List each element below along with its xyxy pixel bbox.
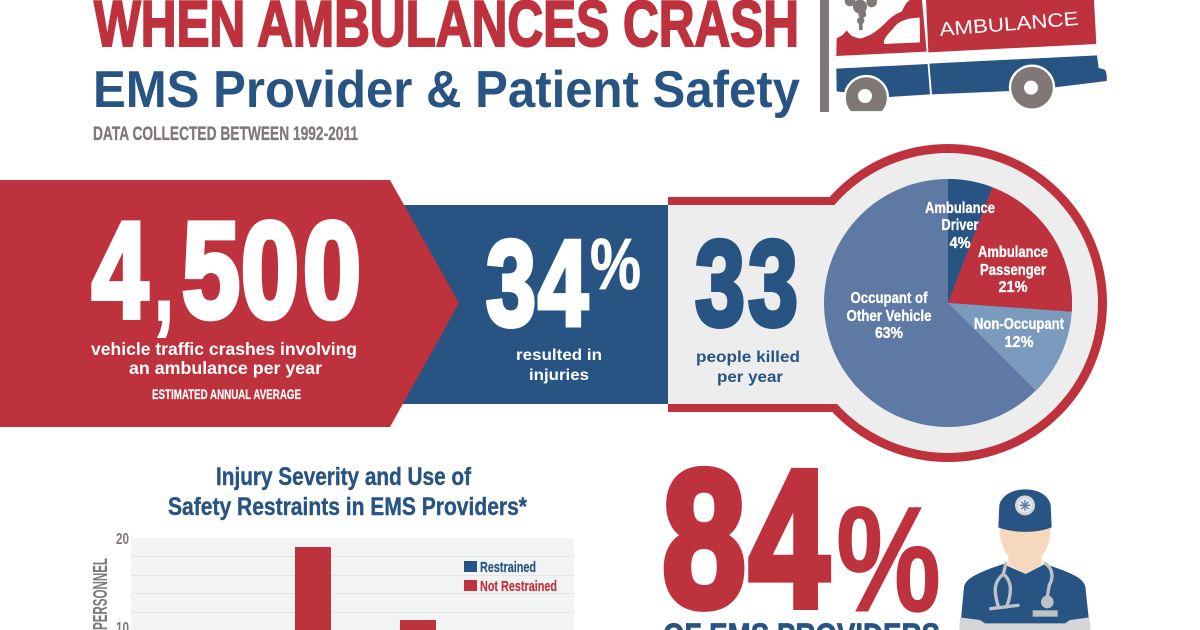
stat: 33 killed: people killed — [696, 349, 800, 366]
legend: Not Restrained — [480, 578, 557, 595]
stat: 33 killed: per year — [717, 369, 783, 386]
pie label: non-occupant: 12% — [1004, 334, 1034, 351]
pie label: other vehicle: Other Vehicle — [846, 308, 932, 325]
legend: Restrained — [480, 559, 536, 576]
smoke — [845, 0, 877, 30]
stat: 34% injuries: 3 — [486, 215, 536, 351]
stat: 33 killed: 3 — [748, 215, 798, 351]
label: AMBULANCE — [939, 9, 1079, 41]
pie label: driver: Driver — [942, 217, 978, 234]
divider post — [820, 0, 829, 112]
bar chart — [90, 531, 574, 630]
bar: not restrained short — [400, 620, 436, 630]
stat: 4,500 crashes: 0 — [303, 194, 361, 346]
pie label: other vehicle — [846, 290, 932, 342]
pie label: driver: Ambulance — [925, 200, 995, 217]
stat: 4,500 crashes: 0 — [241, 194, 299, 346]
stat: 34% injuries — [486, 215, 641, 384]
box body — [926, 0, 1096, 52]
pie chart: people killed by role — [824, 179, 1072, 427]
bar: not restrained tall — [295, 547, 331, 630]
stat: 34% injuries: 4 — [538, 215, 588, 351]
cap — [998, 489, 1052, 532]
icon: EMS provider — [959, 489, 1091, 630]
pie label: passenger: Passenger — [980, 262, 1046, 279]
pie label: driver: 4% — [950, 235, 970, 252]
pie label: driver — [925, 200, 995, 252]
torso — [960, 564, 1090, 630]
stat: 33 killed: 3 — [695, 215, 745, 351]
lower body — [836, 64, 930, 97]
stat: 4,500 crashes — [91, 194, 361, 402]
pie label: other vehicle: 63% — [875, 325, 903, 342]
stat: 4,500 crashes: 5 — [182, 194, 240, 346]
y axis title: PERSONNEL — [90, 558, 112, 630]
legend — [464, 559, 557, 595]
date range note: DATA COLLECTED BETWEEN 1992-2011 — [93, 124, 358, 145]
stat: 4,500 crashes: vehicle traffic crashes involving — [91, 339, 357, 359]
stat: 34% injuries: % — [590, 225, 641, 305]
panel: injuries band — [380, 205, 668, 404]
stat: 34% injuries: injuries — [529, 367, 589, 384]
stat: 33 killed — [695, 215, 800, 386]
y axis labels — [116, 531, 129, 630]
panel: crashes arrow — [0, 180, 459, 427]
wheels — [845, 76, 888, 112]
chart heading: Safety Restraints in EMS Providers* — [168, 493, 527, 521]
chart heading: Injury Severity and Use of — [216, 463, 472, 491]
stat: 4,500 crashes: , — [155, 220, 173, 343]
pie label: other vehicle: Occupant of — [850, 290, 928, 307]
name badge — [1033, 610, 1058, 617]
pie label: passenger — [978, 244, 1048, 296]
reflective stripe — [959, 617, 1091, 630]
stat: 4,500 crashes: an ambulance per year — [129, 358, 322, 378]
pie label: passenger: 21% — [998, 279, 1028, 296]
subtitle: EMS Provider & Patient Safety — [93, 61, 800, 119]
pie label: non-occupant — [974, 316, 1065, 351]
panel: circular pie backing — [668, 144, 1107, 462]
face and neck — [999, 527, 1051, 574]
stat: 84% — [662, 430, 941, 630]
stat: 4,500 crashes: 4 — [92, 194, 148, 346]
chart heading — [168, 463, 527, 521]
pie label: passenger: Ambulance — [978, 244, 1048, 261]
icon: crashed ambulance — [836, 0, 1107, 112]
pie label: non-occupant: Non-Occupant — [974, 316, 1065, 333]
cab window — [884, 18, 920, 44]
y axis labels: 20 — [116, 531, 129, 548]
stethoscope — [991, 563, 1052, 609]
cab upper — [836, 0, 927, 56]
stat: 4,500 crashes: ESTIMATED ANNUAL AVERAGE — [152, 386, 301, 402]
stat: 34% injuries: resulted in — [516, 347, 602, 364]
